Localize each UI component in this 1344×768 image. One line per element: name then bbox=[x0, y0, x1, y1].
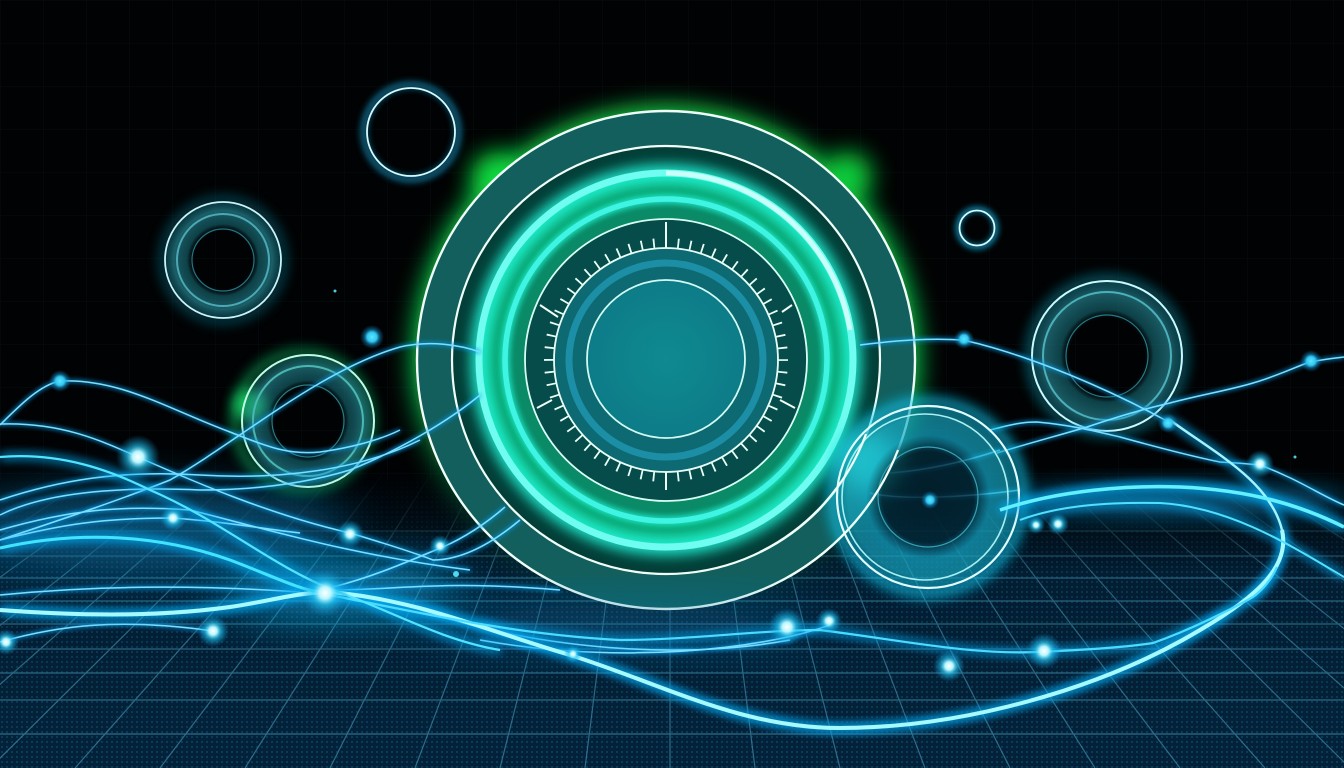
dial ticks bbox=[549, 243, 783, 477]
central disc bbox=[554, 248, 778, 472]
inner white circle bbox=[587, 280, 745, 438]
bright teal rings bbox=[479, 173, 853, 547]
bright highlight arc bbox=[666, 173, 850, 330]
top small ring bbox=[364, 85, 458, 179]
main concentric ring gauge bbox=[417, 111, 915, 609]
lower right lens ring bbox=[833, 402, 1023, 592]
lower left ring with green glow bbox=[234, 353, 374, 489]
outer white rings bbox=[417, 111, 915, 609]
blue haze around waves bbox=[0, 484, 1344, 647]
left ring bbox=[163, 200, 283, 320]
main ring green glow bbox=[412, 106, 920, 614]
right ring bbox=[1030, 279, 1184, 433]
main ring edges crossing the lens bbox=[760, 434, 898, 576]
outer band bbox=[418, 112, 914, 608]
thin wave strands bbox=[0, 339, 1344, 653]
glowing nodes bbox=[0, 290, 1322, 682]
perspective floor grid bbox=[0, 481, 1344, 768]
bright wave lines bbox=[0, 420, 1344, 728]
background grid bbox=[0, 0, 1344, 480]
dial background and outline bbox=[525, 219, 807, 501]
small ring right bbox=[958, 209, 996, 247]
bright ring glow bbox=[480, 174, 852, 546]
green fill between bright rings bbox=[491, 185, 841, 535]
